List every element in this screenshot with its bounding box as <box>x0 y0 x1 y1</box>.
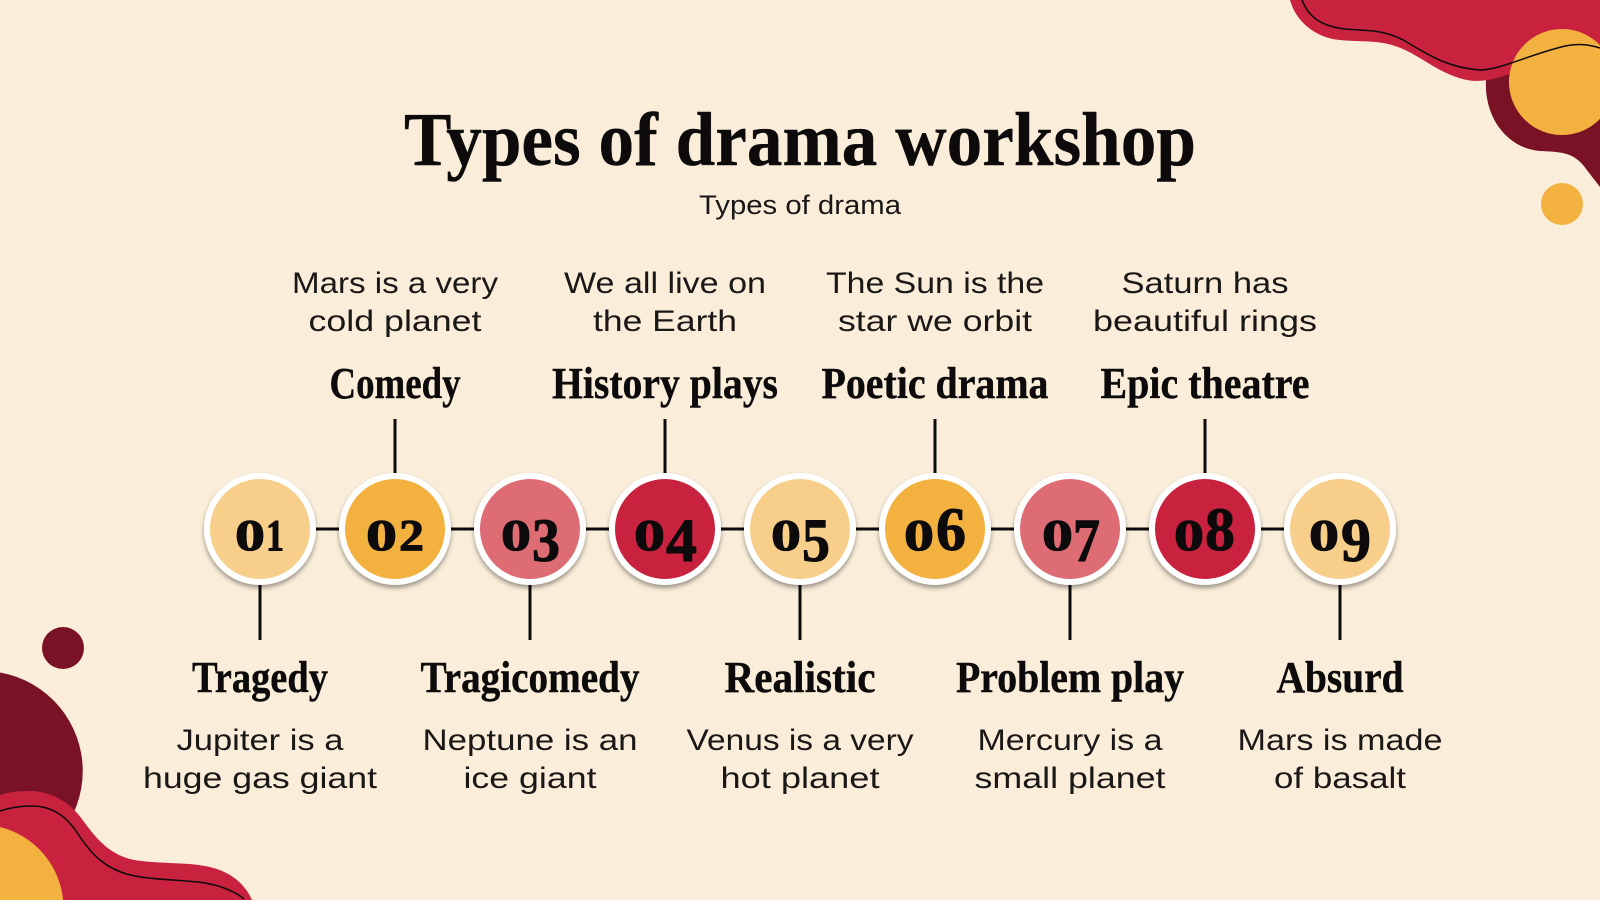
node 09: 0 <box>1309 511 1339 560</box>
item: Problem play: small planet <box>974 762 1166 795</box>
item: Tragicomedy: Tragicomedy <box>420 653 640 702</box>
item: Tragedy: Tragedy <box>192 653 328 702</box>
item: Problem play: Problem play <box>956 653 1184 702</box>
node 08: 8 <box>1205 497 1235 564</box>
item: Realistic: Realistic <box>724 653 876 702</box>
node 05 <box>744 473 856 585</box>
item: Absurd: Mars is made <box>1238 724 1442 757</box>
node 02: 2 <box>399 511 424 560</box>
item: Absurd: Absurd <box>1276 653 1404 702</box>
decoration: bottom-left blobs <box>0 627 252 900</box>
node 02: 0 <box>366 511 397 560</box>
item: Problem play: Mercury is a <box>978 724 1163 757</box>
title: Types of drama workshop <box>404 98 1196 182</box>
item: Comedy <box>292 267 498 408</box>
horizontal connector line <box>260 528 1340 530</box>
decoration: top-right blobs <box>1290 0 1600 225</box>
item: Realistic <box>686 653 914 795</box>
node 07: 7 <box>1073 508 1100 575</box>
node 05: 5 <box>802 508 830 575</box>
item: Epic theatre: beautiful rings <box>1093 305 1317 338</box>
item: Poetic drama: The Sun is the <box>826 267 1044 300</box>
node 03: 0 <box>501 511 531 560</box>
node 01: 1 <box>266 511 284 560</box>
node 06: 6 <box>936 497 966 564</box>
item: Epic theatre: Epic theatre <box>1100 359 1310 408</box>
node 01 <box>204 473 316 585</box>
item: Poetic drama: star we orbit <box>838 305 1033 338</box>
node 09 <box>1284 473 1396 585</box>
node 06: 0 <box>904 511 934 560</box>
node 04: 0 <box>634 511 665 560</box>
item: Tragedy: Jupiter is a <box>176 724 344 757</box>
item: History plays: the Earth <box>593 305 737 338</box>
node 04: 4 <box>666 508 697 575</box>
node 07: 0 <box>1042 511 1073 560</box>
item: Comedy: cold planet <box>308 305 482 338</box>
node 06 <box>879 473 991 585</box>
item: History plays: We all live on <box>564 267 766 300</box>
item: Poetic drama <box>822 267 1048 408</box>
item: Comedy: Mars is a very <box>292 267 498 300</box>
node 03: 3 <box>532 508 560 575</box>
node 05: 0 <box>771 511 801 560</box>
item: History plays <box>552 267 778 408</box>
item: Epic theatre <box>1093 267 1317 408</box>
item: Tragicomedy <box>420 653 640 795</box>
item: Tragicomedy: ice giant <box>464 762 597 795</box>
item: Tragedy <box>143 653 378 795</box>
item: Epic theatre: Saturn has <box>1122 267 1288 300</box>
item: Realistic: hot planet <box>720 762 880 795</box>
node 01: 0 <box>235 511 265 560</box>
item: Problem play <box>956 653 1184 795</box>
item: Realistic: Venus is a very <box>686 724 914 757</box>
item: Absurd <box>1238 653 1442 795</box>
item: Tragicomedy: Neptune is an <box>422 724 638 757</box>
node 02 <box>339 473 451 585</box>
subtitle: Types of drama <box>699 190 902 220</box>
node 04 <box>609 473 721 585</box>
vertical connectors <box>260 419 1340 640</box>
item: Tragedy: huge gas giant <box>143 762 378 795</box>
node 07 <box>1014 473 1126 585</box>
node 08: 0 <box>1174 511 1204 560</box>
node 09: 9 <box>1341 508 1371 575</box>
item: History plays: History plays <box>552 359 778 408</box>
item: Poetic drama: Poetic drama <box>822 359 1048 408</box>
node 03 <box>474 473 586 585</box>
item: Absurd: of basalt <box>1274 762 1407 795</box>
item: Comedy: Comedy <box>330 359 460 408</box>
node 08 <box>1149 473 1261 585</box>
